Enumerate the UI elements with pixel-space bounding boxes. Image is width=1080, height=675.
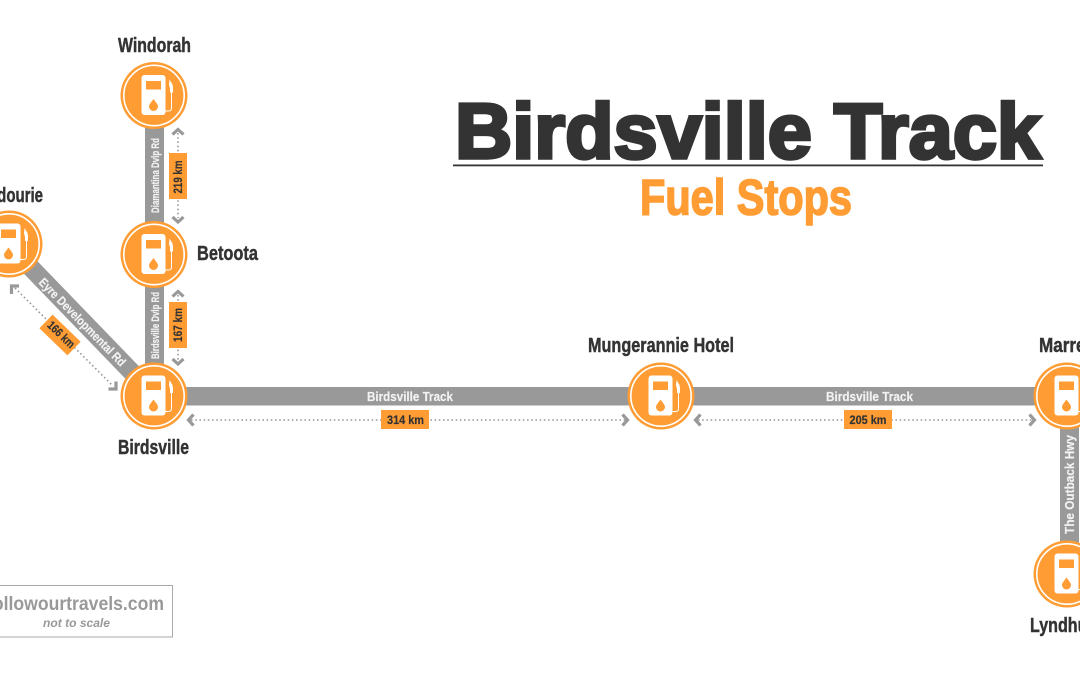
distance: Birdsville to Mungerannie 314 km: 314 km	[387, 413, 424, 427]
label: Windorah: Windorah	[118, 35, 191, 57]
distance: Bedourie to Birdsville 166 km: 166 km	[44, 318, 78, 351]
credit box	[0, 586, 172, 637]
icon: fuel stop Betoota	[120, 221, 188, 288]
road: The Outback Hwy: The Outback Hwy	[1062, 434, 1077, 534]
icon: fuel stop Windorah	[120, 62, 188, 129]
distance: Windorah to Betoota 219 km: 219 km	[171, 160, 185, 194]
road: Birdsville Track east	[661, 387, 1067, 406]
road: Eyre Developmental Rd: Eyre Developmental Rd	[36, 275, 129, 369]
road: Diamantina Dvlp Rd	[145, 96, 164, 254]
road: Birdsville Track east: Birdsville Track	[826, 389, 914, 404]
distance: Birdsville to Mungerannie 314 km	[188, 410, 628, 429]
distance: Betoota to Birdsville 167 km: 167 km	[171, 308, 185, 342]
distance: Mungerannie to Marree 205 km	[696, 410, 1034, 429]
road: The Outback Hwy	[1060, 396, 1079, 574]
road: Eyre Developmental Rd	[2, 238, 161, 402]
road: Birdsville Dvlp Rd: Birdsville Dvlp Rd	[150, 292, 162, 359]
title: Birdsville Track	[455, 87, 1042, 175]
road: Diamantina Dvlp Rd: Diamantina Dvlp Rd	[150, 138, 162, 213]
icon: fuel stop Mungerannie Hotel	[628, 362, 694, 430]
road: Birdsville Track west	[154, 387, 661, 406]
distance: Mungerannie to Marree 205 km: 205 km	[850, 413, 886, 427]
distance: Betoota to Birdsville 167 km	[169, 292, 187, 364]
icon: fuel stop Lyndhurst	[1034, 540, 1080, 608]
road: Birdsville Track west: Birdsville Track	[367, 389, 454, 404]
distance: Bedourie to Birdsville 166 km	[12, 286, 116, 389]
label: Birdsville: Birdsville	[118, 437, 189, 459]
road: Birdsville Dvlp Rd	[145, 254, 164, 396]
icon: fuel stop Bedourie	[0, 210, 42, 278]
icon: fuel stop Marree	[1034, 362, 1080, 430]
subtitle: Fuel Stops	[640, 170, 852, 226]
distance: Windorah to Betoota 219 km	[169, 130, 187, 222]
label: Betoota: Betoota	[197, 243, 259, 265]
label: Mungerannie Hotel: Mungerannie Hotel	[588, 335, 734, 357]
icon: fuel stop Birdsville	[120, 362, 188, 430]
credit box: not to scale	[43, 616, 110, 630]
